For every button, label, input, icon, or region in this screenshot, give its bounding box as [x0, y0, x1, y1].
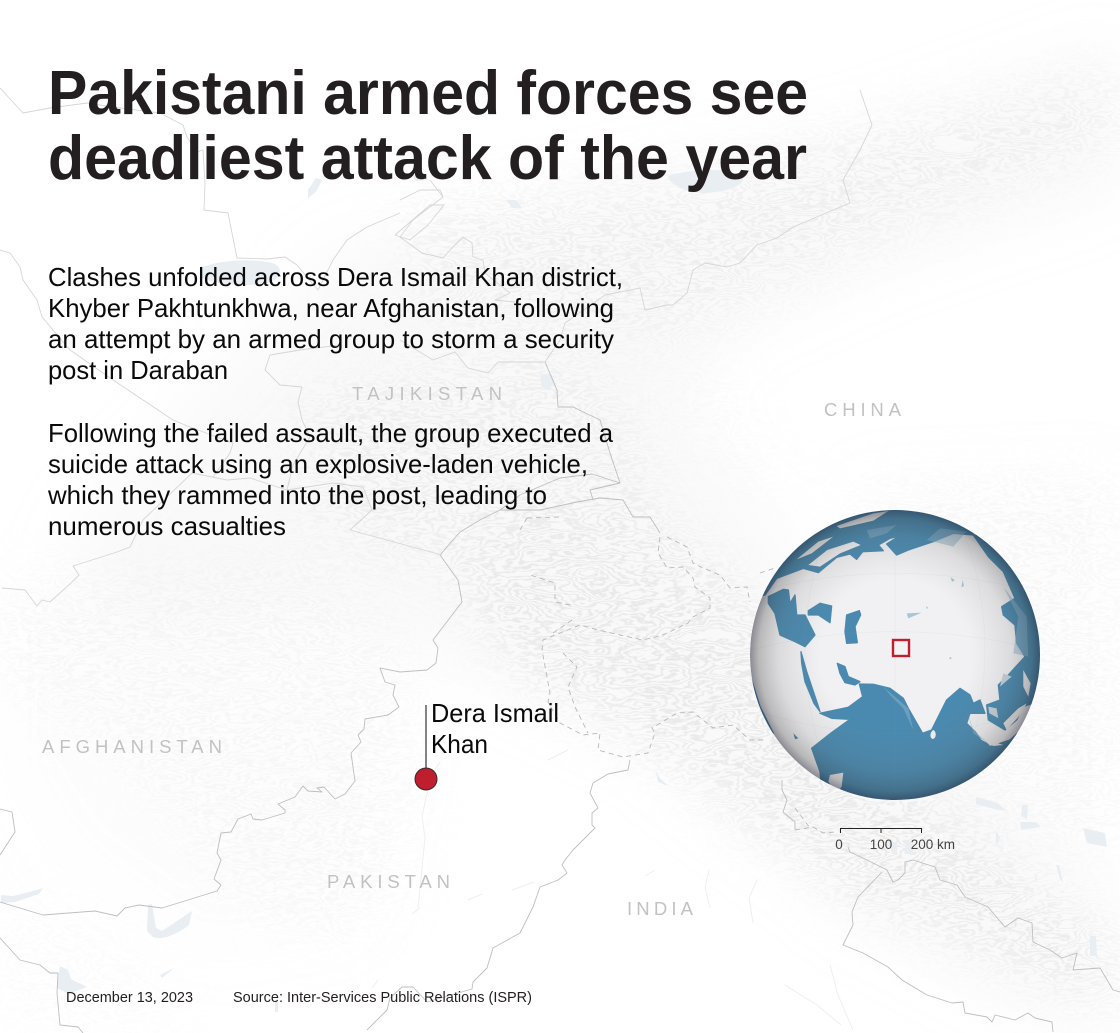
- globe land details: [790, 511, 1031, 793]
- country label: China: CHINA: [824, 399, 902, 420]
- location marker: Dera Ismail Khan: Dera Ismail: [431, 698, 559, 728]
- globe lakes: [907, 575, 964, 659]
- scale bar: 0: [835, 837, 843, 852]
- text block: clashes: post in Daraban: [48, 355, 228, 385]
- country label: Afghanistan: AFGHANISTAN: [42, 736, 222, 757]
- footer: source: Source: Inter-Services Public Relations (ISPR): [233, 990, 532, 1006]
- text block: clashes: Khyber Pakhtunkhwa, near Afghanistan, following: [48, 293, 614, 323]
- globe shallow water: [867, 525, 1028, 743]
- text block: clashes: [48, 262, 623, 385]
- footer: date: December 13, 2023: [66, 990, 193, 1006]
- country label: Tajikistan: TAJIKISTAN: [352, 383, 502, 404]
- scale bar: [835, 828, 955, 852]
- text block: failed assault: Following the failed assault, the group executed a: [48, 418, 614, 448]
- text block: failed assault: which they rammed into the post, leading to: [47, 480, 547, 510]
- text block: failed assault: numerous casualties: [48, 511, 286, 541]
- text block: failed assault: [47, 418, 614, 541]
- location marker: Dera Ismail Khan: Khan: [431, 729, 488, 759]
- title: deadliest attack of the year: [48, 124, 807, 193]
- country label: Pakistan: PAKISTAN: [327, 871, 450, 892]
- text block: clashes: an attempt by an armed group to storm a security: [48, 324, 614, 354]
- text block: failed assault: suicide attack using an explosive-laden vehicle,: [48, 449, 588, 479]
- globe seas: [740, 500, 1042, 807]
- title: Pakistani armed forces see: [48, 59, 808, 128]
- scale bar: 100: [870, 837, 892, 852]
- location marker: Dera Ismail Khan: [415, 698, 559, 790]
- title: [48, 59, 808, 193]
- country label: India: INDIA: [627, 898, 694, 919]
- inset locator square: [893, 640, 909, 656]
- scale bar: 200: [911, 837, 933, 852]
- scale bar: km: [937, 837, 955, 852]
- locator globe: [740, 500, 1042, 807]
- text block: clashes: Clashes unfolded across Dera Ismail Khan district,: [48, 262, 623, 292]
- globe graticule: [764, 546, 1013, 746]
